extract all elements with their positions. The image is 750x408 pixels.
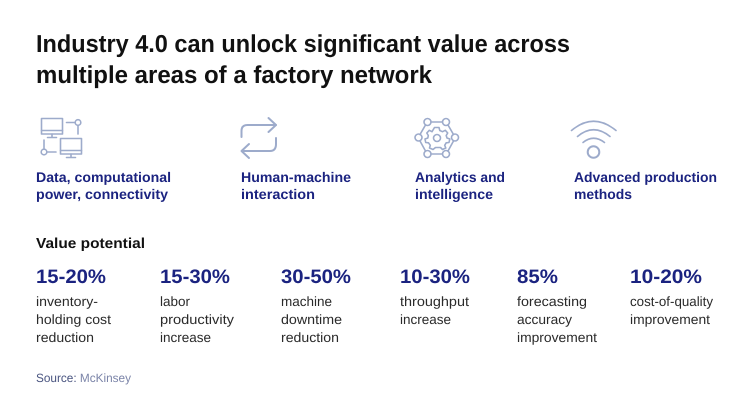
- metric: throughput increase: throughput: [400, 294, 469, 309]
- title: Industry 4.0 can unlock significant value across: [36, 31, 570, 58]
- metric: throughput increase: 10-30%: [400, 266, 470, 288]
- metric: labor productivity increase: increase: [160, 330, 211, 345]
- icon: wireless signal: [572, 121, 616, 158]
- metric: cost-of-quality improvement: cost-of-quality: [630, 294, 713, 309]
- metric: forecasting accuracy improvement: accuracy: [517, 312, 572, 327]
- title: [36, 31, 570, 89]
- metric: forecasting accuracy improvement: 85%: [517, 266, 558, 288]
- metric: machine downtime reduction: downtime: [281, 312, 342, 327]
- pillar: human-machine interaction: interaction: [241, 186, 315, 202]
- metric: forecasting accuracy improvement: [517, 266, 597, 345]
- pillar: analytics and intelligence: Analytics and: [415, 169, 505, 185]
- metric: machine downtime reduction: [281, 266, 351, 345]
- icon: gear network: [415, 118, 458, 158]
- metric: cost-of-quality improvement: 10-20%: [630, 266, 702, 288]
- metric: inventory-holding cost reduction: reduction: [36, 330, 94, 345]
- heading: value potential: Value potential: [36, 236, 145, 252]
- metric: machine downtime reduction: reduction: [281, 330, 339, 345]
- metric: cost-of-quality improvement: [630, 266, 713, 327]
- metric: labor productivity increase: [160, 266, 234, 345]
- metric: throughput increase: increase: [400, 312, 451, 327]
- metric: throughput increase: [400, 266, 470, 327]
- pillar: data, computational power, connectivity: Data, computational: [36, 169, 171, 185]
- metric: inventory-holding cost reduction: holding cost: [36, 312, 111, 327]
- metric: cost-of-quality improvement: improvement: [630, 312, 710, 327]
- icon: connected computers: [41, 118, 82, 158]
- metric: inventory-holding cost reduction: inventory-: [36, 294, 98, 309]
- pillar: advanced production methods: [574, 169, 717, 202]
- metric: inventory-holding cost reduction: 15-20%: [36, 266, 106, 288]
- metric: forecasting accuracy improvement: improvement: [517, 330, 597, 345]
- metric: inventory-holding cost reduction: [36, 266, 111, 345]
- metric: machine downtime reduction: machine: [281, 294, 332, 309]
- title: multiple areas of a factory network: [36, 62, 432, 89]
- metric: labor productivity increase: 15-30%: [160, 266, 230, 288]
- pillar: advanced production methods: methods: [574, 186, 632, 202]
- pillar: analytics and intelligence: [415, 169, 505, 202]
- pillar: data, computational power, connectivity: [36, 169, 171, 202]
- pillar: human-machine interaction: Human-machine: [241, 169, 351, 185]
- pillar: analytics and intelligence: intelligence: [415, 186, 493, 202]
- metric: labor productivity increase: productivity: [160, 312, 234, 327]
- metric: machine downtime reduction: 30-50%: [281, 266, 351, 288]
- pillar: data, computational power, connectivity: power, connectivity: [36, 186, 168, 202]
- pillar: human-machine interaction: [241, 169, 351, 202]
- pillar: advanced production methods: Advanced production: [574, 169, 717, 185]
- source note: Source: McKinsey: [36, 371, 131, 385]
- metric: forecasting accuracy improvement: forecasting: [517, 294, 587, 309]
- metric: labor productivity increase: labor: [160, 294, 190, 309]
- icon: exchange arrows: [242, 118, 276, 158]
